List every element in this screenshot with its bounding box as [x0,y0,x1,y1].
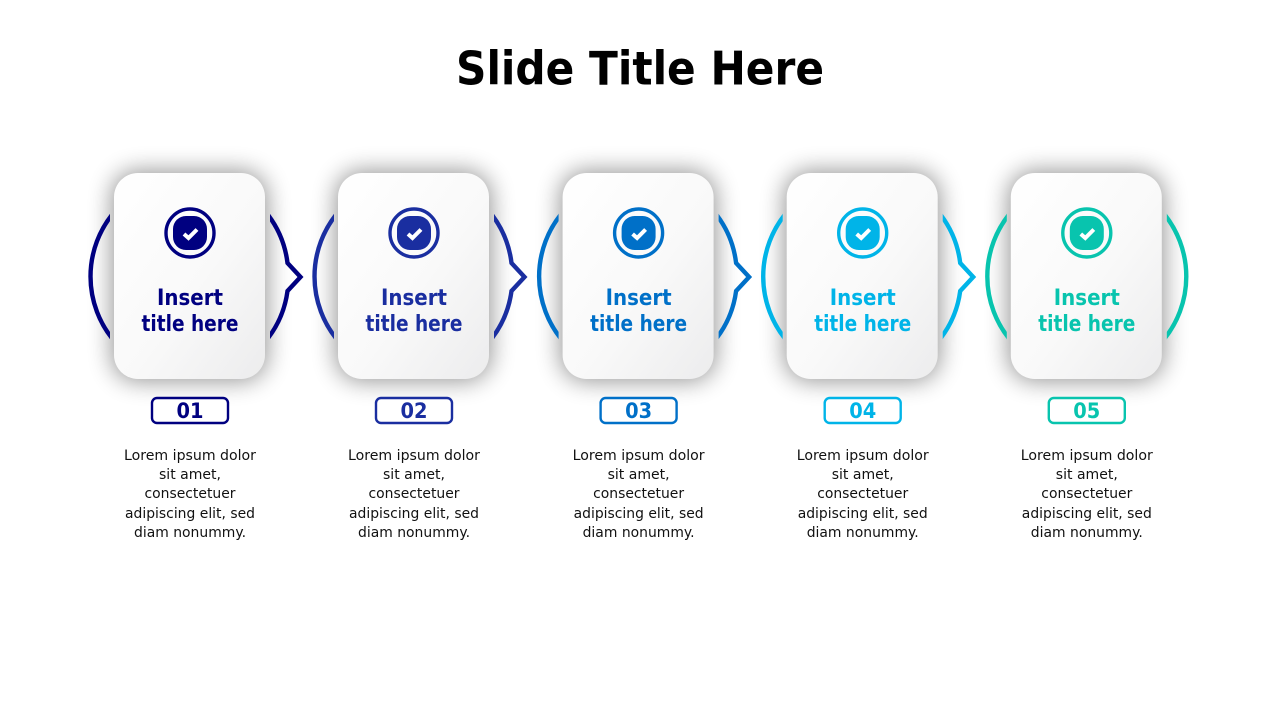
body text 05 [1021,447,1153,541]
card shadow 01 [112,171,267,381]
step 02 [315,171,524,541]
card heading 01 [142,286,238,337]
card shadow 04 [785,171,940,381]
body text 04: sit amet, [832,466,894,483]
card heading 05: title here [1038,312,1135,337]
number badge 01: 01 [176,399,204,423]
body text 05: sit amet, [1056,466,1118,483]
step 04 [763,171,973,541]
card heading 02 [366,286,462,337]
number badge 03: 03 [625,399,652,423]
arc with arrow 03 [539,212,749,341]
body text 03: sit amet, [608,466,670,483]
card heading 01: title here [142,312,238,337]
body text 05: diam nonummy. [1031,524,1143,541]
card heading 03 [590,286,687,337]
body text 02: adipiscing elit, sed [349,505,479,522]
card heading 04: title here [814,312,911,337]
icon: check 04 [839,209,887,257]
number badge 05: 05 [1073,399,1100,423]
number badge 02: 02 [400,399,428,423]
number badge 04: 04 [849,399,876,423]
step 05 [987,171,1186,541]
body text 03: diam nonummy. [583,524,695,541]
body text 01: adipiscing elit, sed [125,505,255,522]
arc with arrow 02 [315,212,524,341]
number badge 03 [601,398,677,423]
body text 04: adipiscing elit, sed [798,505,928,522]
body text 03: adipiscing elit, sed [574,505,704,522]
arc with arrow 04 [763,212,973,341]
body text 01: sit amet, [159,466,221,483]
body text 01 [124,447,256,541]
card shadow 02 [336,171,491,381]
body text 01: consectetuer [144,485,236,502]
body text 04: diam nonummy. [807,524,919,541]
card shadow 05 [1009,171,1164,381]
number badge 02 [376,398,452,423]
body text 02: diam nonummy. [358,524,470,541]
step 03 [539,171,749,541]
card 03 [563,173,714,379]
body text 03: consectetuer [593,485,684,502]
body text 03 [573,447,705,541]
card heading 04 [814,286,911,337]
number badge 04 [825,398,901,423]
icon: check 01 [166,209,214,257]
body text 05: consectetuer [1041,485,1132,502]
icon: check 05 [1063,209,1111,257]
body text 02 [348,447,480,541]
number badge 05 [1049,398,1125,423]
arc with arrow 01 [91,212,301,341]
body text 05: adipiscing elit, sed [1022,505,1152,522]
card heading 03: Insert [606,286,672,311]
card heading 02: title here [366,312,462,337]
card heading 03: title here [590,312,687,337]
arcs 05 [987,212,1186,341]
body text 01: Lorem ipsum dolor [124,447,256,464]
icon: check 03 [615,209,663,257]
number badge 01 [152,398,228,423]
card heading 04: Insert [830,286,896,311]
body text 02: consectetuer [368,485,460,502]
icon: check 02 [390,209,438,257]
body text 03: Lorem ipsum dolor [573,447,705,464]
title: Slide Title Here [456,42,824,96]
body text 04: consectetuer [817,485,908,502]
card 02 [338,173,489,379]
body text 01: diam nonummy. [134,524,246,541]
body text 02: Lorem ipsum dolor [348,447,480,464]
step 01 [91,171,301,541]
body text 05: Lorem ipsum dolor [1021,447,1153,464]
card 05 [1011,173,1162,379]
card heading 05 [1038,286,1135,337]
body text 04: Lorem ipsum dolor [797,447,929,464]
body text 02: sit amet, [383,466,445,483]
card 04 [787,173,938,379]
card heading 05: Insert [1054,286,1120,311]
card shadow 03 [561,171,716,381]
card 01 [114,173,265,379]
body text 04 [797,447,929,541]
card heading 02: Insert [381,286,447,311]
card heading 01: Insert [157,286,223,311]
